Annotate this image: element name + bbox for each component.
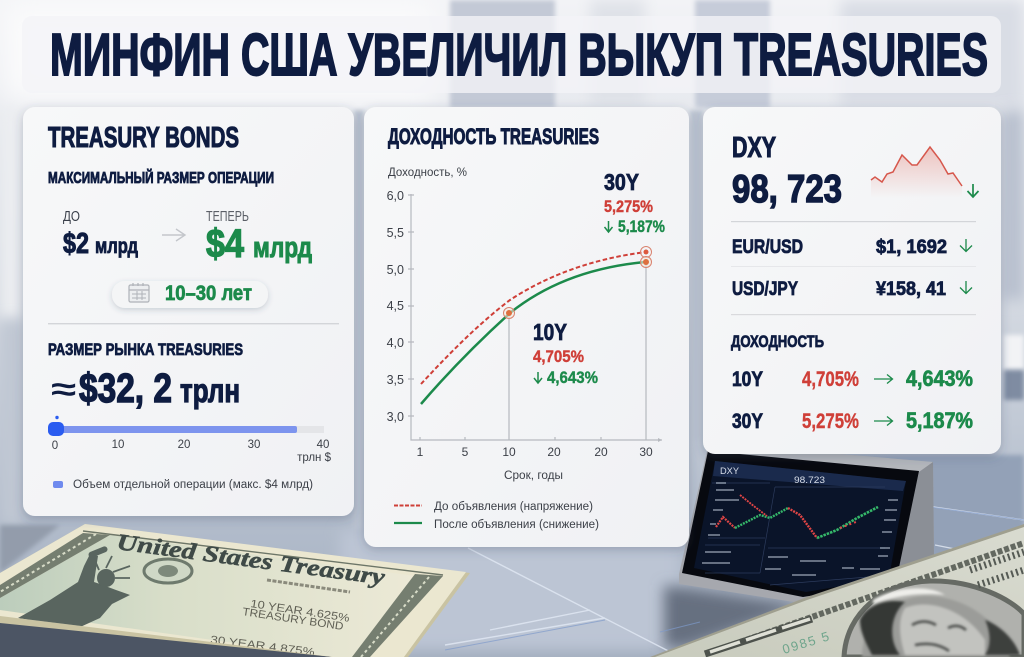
callout: 10Y: 10Y [533,319,567,345]
line chart: Срок, годы [504,468,563,482]
bond: guilloche border [0,531,443,657]
DXY value: DXY [732,132,776,164]
sparkline [871,147,962,198]
line chart: 20 [547,445,561,459]
callout: 30Y: 5,187% [618,217,665,236]
chart legend [394,501,599,531]
before value: млрд [95,235,138,258]
curve: before announcement [421,252,646,384]
market size value: $32, 2 [79,365,172,411]
row: 10Y yield: 4,643% [906,366,973,391]
after value: млрд [253,232,312,264]
callout: 30Y [604,169,665,236]
bond: statue of liberty [18,545,130,628]
line chart: 3,5 [387,373,404,387]
row: 10Y yield: 4,705% [802,368,859,391]
bar axis labels: 30 [248,439,260,451]
bar axis labels: трлн $ [297,452,332,464]
dollar bill photo: 0985 5 [780,628,831,657]
bar axis labels: 0 [52,440,58,452]
icon: down arrow [968,184,978,197]
before value [63,209,138,260]
row: EUR/USD: EUR/USD [732,236,803,258]
line chart: 3,0 [387,410,404,424]
line chart: 5,5 [387,226,404,240]
bond: small engraved text: 10 YEAR 4.625% [250,598,350,625]
line chart: 5 [462,445,469,459]
device: screen: 98.723 [794,475,825,485]
markers [504,246,652,318]
heading: treasury bonds: TREASURY BONDS [48,122,239,154]
bond: seal [144,559,192,583]
line chart: 4,5 [387,299,404,313]
bar axis labels: 40 [317,439,329,451]
device: screen [694,461,906,592]
line chart: 10 [502,445,516,459]
row: EUR/USD [732,236,972,258]
row: EUR/USD: $1, 1692 [876,236,947,258]
maturity pill: 10–30 лет [165,282,252,305]
callout: 10Y: 4,643% [547,368,598,387]
row: 30Y yield: 5,187% [906,408,973,433]
bond: green field [0,535,302,652]
device: screen: DXY [720,466,739,476]
row: 30Y yield: 30Y [732,410,763,433]
panel: treasury bonds [23,107,354,516]
chart legend: После объявления (снижение) [434,519,599,531]
panel: DXY and currencies [703,107,1001,454]
callout: 10Y [533,319,598,387]
row: USD/JPY: USD/JPY [732,278,798,300]
bill: Franklin portrait [844,581,1024,657]
line chart: 30 [639,445,653,459]
maturity pill [112,281,268,308]
dollar bill photo [650,524,1024,657]
market size value [51,365,240,411]
callout: 10Y: 4,705% [533,347,584,366]
row: USD/JPY: ¥158, 41 [876,278,946,300]
bar axis labels [52,439,332,464]
row: USD/JPY [732,278,972,300]
bar axis labels: 10 [112,439,124,451]
treasury bond certificate photo [0,520,470,657]
after value [206,209,312,266]
line chart: 20 [594,445,608,459]
row: 30Y yield: 5,275% [802,410,859,433]
curve: after announcement [421,262,646,404]
line chart: 6,0 [387,189,404,203]
bond: script title: United States Treasury [115,529,387,590]
line chart [387,167,665,482]
bar legend: Объем отдельной операции (макс. $4 млрд) [73,479,313,491]
bond: small engraved text: 30 YEAR 4.875% [210,634,316,657]
title panel [22,16,1001,93]
line chart: 1 [417,445,424,459]
before value: $2 [63,228,89,260]
after value: ТЕПЕРЬ [206,209,249,225]
subheading: yield: ДОХОДНОСТЬ [731,332,824,351]
heading: treasury yields: ДОХОДНОСТЬ TREASURIES [388,124,599,149]
subheading: max operation size: МАКСИМАЛЬНЫЙ РАЗМЕР ОПЕРАЦИИ [48,169,274,187]
subheading: market size: РАЗМЕР РЫНКА TREASURIES [48,340,243,359]
row: 10Y yield [732,366,973,391]
after value: $4 [206,222,245,266]
panel: treasury yields [364,107,689,547]
trading display device photo [679,443,934,604]
line chart: Доходность, % [388,167,467,179]
bond: small engraved text [210,580,350,657]
before value: ДО [63,209,80,225]
bond: small engraved text: TREASURY BOND [242,606,344,633]
callout: 30Y: 5,275% [604,197,653,216]
row: 30Y yield [732,408,973,433]
arrow: before to now [162,229,185,241]
line chart: 4,0 [387,336,404,350]
line chart: 5,0 [387,263,404,277]
icon: calendar [129,283,149,302]
progress bar [48,416,324,436]
market size value: ≈ [51,371,76,407]
row: 10Y yield: 10Y [732,368,763,391]
DXY value: 98, 723 [732,168,842,211]
callout: 30Y: 30Y [604,169,639,195]
chart legend: До объявления (напряжение) [434,501,593,513]
market size value: трлн [180,372,240,409]
DXY value [732,132,842,211]
bar axis labels: 20 [178,439,190,451]
